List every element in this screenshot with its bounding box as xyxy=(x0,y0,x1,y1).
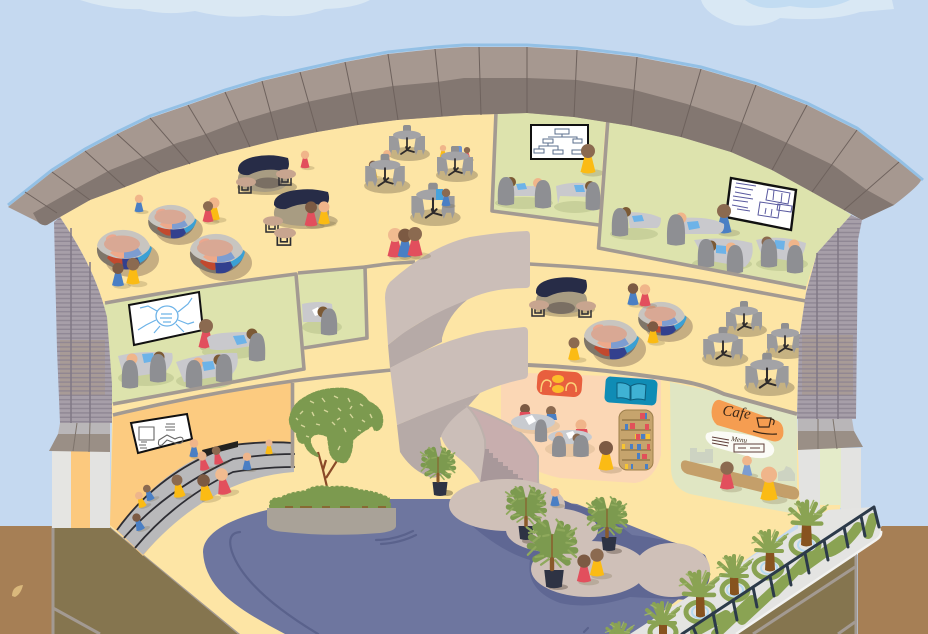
bookshelf xyxy=(619,410,653,470)
column cornice: right xyxy=(798,419,863,450)
audience xyxy=(131,439,277,534)
railing xyxy=(682,507,879,634)
stair flight xyxy=(441,407,540,492)
middle right social area xyxy=(529,277,808,396)
underground: left xyxy=(53,526,240,634)
screen: plans xyxy=(726,178,796,230)
desks xyxy=(495,177,600,213)
room: small study xyxy=(298,267,367,348)
cloud: left xyxy=(80,0,370,17)
underground: right xyxy=(735,552,857,634)
presenter xyxy=(580,144,604,177)
spiral staircase xyxy=(385,231,540,492)
presenter xyxy=(198,319,222,352)
sofa one xyxy=(236,155,297,195)
roof edge highlight xyxy=(8,45,923,205)
roof xyxy=(8,45,923,225)
poster: open book xyxy=(604,376,658,406)
roof lower band xyxy=(33,78,894,225)
room: large top right seminar xyxy=(599,110,851,290)
poster: people xyxy=(536,369,583,398)
zone: cafe xyxy=(670,382,797,514)
cafe sign: Cafe xyxy=(721,403,752,423)
menu board xyxy=(706,431,774,458)
ground: left soil xyxy=(0,526,54,634)
bush xyxy=(270,486,391,508)
lecture screen xyxy=(131,414,192,453)
cafe tables xyxy=(364,125,478,226)
cafe counter xyxy=(681,448,799,504)
people xyxy=(112,151,431,289)
room: lecture theatre xyxy=(110,382,295,556)
planter xyxy=(267,508,396,535)
ramp edge xyxy=(736,531,881,634)
group desks xyxy=(118,328,265,389)
visitors on stones xyxy=(550,488,612,585)
ottoman pods xyxy=(97,205,252,281)
sofa three xyxy=(529,277,596,317)
column base: left xyxy=(52,450,110,528)
cafe sign xyxy=(712,400,783,441)
louvre column: left xyxy=(54,217,112,423)
room: left seminar xyxy=(104,274,304,404)
planting scribble xyxy=(695,518,873,634)
stepping stones xyxy=(449,479,710,605)
sofa two xyxy=(263,189,338,245)
plant: by stairs xyxy=(421,447,455,496)
walls and floor slabs xyxy=(105,112,806,468)
tree canopy xyxy=(290,389,382,487)
ground: right soil xyxy=(858,526,928,634)
reader at bookshelf xyxy=(598,441,622,474)
louvre column: right xyxy=(797,215,862,419)
tiered seating xyxy=(117,442,295,555)
plant: island three xyxy=(527,520,576,590)
desks xyxy=(610,207,808,274)
planting rings xyxy=(611,535,819,634)
presenter xyxy=(716,204,740,237)
ottoman pods xyxy=(584,302,693,367)
plant: island two xyxy=(587,497,626,554)
pond ripples xyxy=(230,531,588,634)
reading tables and readers xyxy=(511,404,595,457)
upper floor social area xyxy=(97,125,478,289)
people xyxy=(568,283,665,363)
zone: reading area xyxy=(501,372,661,483)
column base: right xyxy=(798,448,861,538)
room: top centre seminar xyxy=(491,110,606,226)
cloud: right xyxy=(701,0,894,26)
cafe tables xyxy=(702,301,808,396)
planter with tree xyxy=(267,389,396,535)
column cornice: left xyxy=(49,423,110,452)
screen: mind map xyxy=(129,292,203,345)
building floor xyxy=(60,100,851,634)
pond xyxy=(203,499,690,634)
plant: island one xyxy=(506,486,545,544)
lectern xyxy=(202,441,238,456)
roof upper band xyxy=(8,47,921,225)
palms xyxy=(605,500,828,634)
leaf in soil xyxy=(12,585,23,597)
planted ramp xyxy=(605,500,881,634)
screen: flowchart xyxy=(531,125,588,159)
menu board: Menu xyxy=(730,435,748,445)
roof ribs xyxy=(25,47,899,213)
